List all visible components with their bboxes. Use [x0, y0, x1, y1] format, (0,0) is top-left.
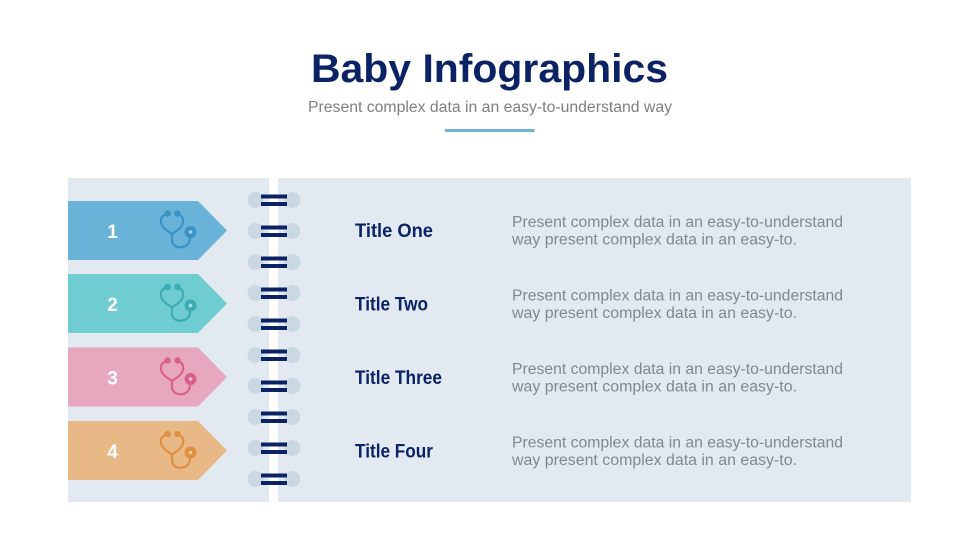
arrow 4	[68, 421, 227, 480]
number 3: 3	[107, 368, 118, 390]
text: description four: Present complex data in an easy-to-understand	[512, 434, 843, 452]
icon: stethoscope pink	[161, 357, 196, 394]
arrow 1	[68, 201, 227, 260]
text: description four: way present complex data in an easy-to.	[511, 452, 797, 469]
number 2: 2	[107, 295, 118, 316]
arrow 3	[68, 348, 227, 406]
icon: stethoscope blue	[161, 210, 196, 247]
heading: title one: Title One	[355, 221, 433, 242]
number 1: 1	[107, 222, 118, 243]
icon: stethoscope orange	[161, 431, 196, 468]
heading: title four: Title Four	[355, 442, 434, 462]
row 2	[68, 274, 843, 333]
text: description three: way present complex data in an easy-to.	[511, 378, 797, 396]
title underline	[445, 129, 534, 132]
text: description two: way present complex data in an easy-to.	[511, 305, 797, 322]
text: description one: way present complex data in an easy-to.	[511, 232, 797, 248]
text: description three: Present complex data in an easy-to-understand	[512, 361, 843, 378]
icon: stethoscope teal	[161, 284, 196, 321]
title: Baby Infographics	[311, 47, 668, 91]
subtitle: Present complex data in an easy-to-understand way	[308, 99, 672, 116]
row 1	[68, 201, 843, 260]
heading: title two: Title Two	[355, 294, 428, 316]
number 4: 4	[107, 442, 118, 463]
row 4	[68, 421, 843, 480]
arrow 2	[68, 274, 227, 333]
text: description two: Present complex data in an easy-to-understand	[512, 288, 843, 304]
heading: title three: Title Three	[355, 368, 442, 389]
text: description one: Present complex data in an easy-to-understand	[512, 214, 843, 231]
panel: notebook background	[68, 178, 911, 502]
spiral binding	[248, 192, 300, 487]
row 3	[68, 348, 843, 406]
